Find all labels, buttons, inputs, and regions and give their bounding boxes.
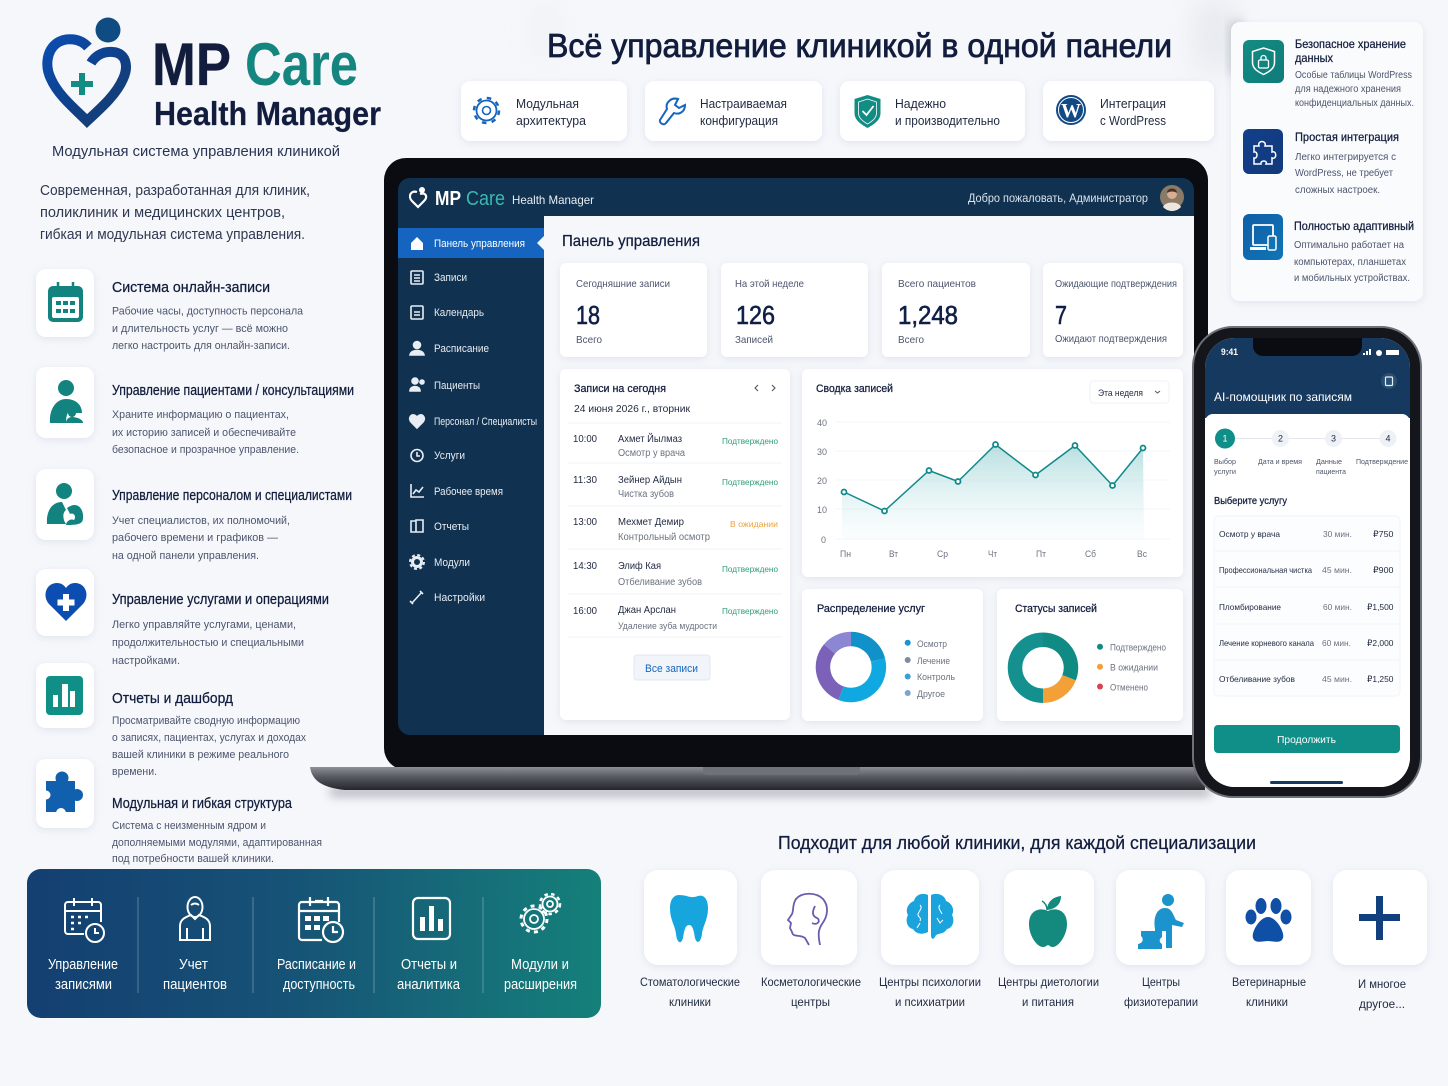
phone header: 9:41 — [1221, 347, 1238, 357]
description — [112, 515, 290, 562]
feature: staff — [36, 469, 352, 562]
service row — [1219, 565, 1394, 575]
header logo: Health Manager — [512, 193, 594, 207]
stat card: pending: Ожидают подтверждения — [1055, 333, 1167, 345]
y axis: 20 — [817, 476, 827, 487]
x axis: Чт — [988, 549, 998, 560]
heading: Управление услугами и операциями — [112, 592, 329, 608]
feature: modular — [36, 759, 322, 865]
line series — [842, 442, 1146, 539]
nav labels: Отчеты — [434, 521, 469, 533]
specialization: psychology: и психиатрии — [895, 995, 965, 1009]
description: под потребности вашей клиники. — [112, 853, 274, 865]
nav labels: Настройки — [434, 592, 485, 604]
chip: reliable: и производительно — [895, 113, 1000, 128]
logo — [47, 18, 381, 132]
chip: configurable — [645, 81, 822, 141]
benefit: responsive: Полностью адаптивный — [1294, 219, 1414, 233]
benefit: easy integration — [1243, 129, 1399, 196]
service row: Отбеливание зубов — [1219, 674, 1295, 684]
service row — [1219, 674, 1394, 684]
appointment row: Зейнер Айдын — [618, 475, 682, 486]
description: продолжительностью и специальными — [112, 637, 304, 649]
description: о записях, пациентах, услугах и доходах — [112, 732, 306, 744]
appointment row — [573, 605, 778, 632]
laptop mockup — [310, 158, 1210, 796]
feature: patients — [36, 367, 354, 456]
nav labels: Записи — [434, 272, 467, 284]
service row: 30 мин. — [1323, 529, 1352, 539]
band item: modules: расширения — [504, 976, 577, 993]
band item: appointments: записями — [55, 976, 112, 993]
description: и длительность услуг — всё можно — [112, 323, 288, 335]
service row: 60 мин. — [1323, 602, 1352, 612]
band item: reports: аналитика — [397, 976, 461, 993]
icon: puzzle — [36, 759, 94, 828]
specialization: nutrition: Центры диетологии — [998, 975, 1099, 989]
band item: schedule: Расписание и — [277, 956, 356, 973]
description — [112, 619, 304, 667]
nav labels: Рабочее время — [434, 486, 503, 498]
description: безопасное и прозрачное управление. — [112, 444, 299, 456]
panel: appointment summary line chart: Сводка записей — [816, 383, 893, 395]
service row: Осмотр у врача — [1219, 529, 1280, 539]
appointment row: Чистка зубов — [618, 488, 674, 500]
service row: 45 мин. — [1322, 674, 1352, 684]
appointment row: 11:30 — [573, 475, 597, 486]
booking steps: 4 — [1385, 434, 1391, 444]
heading: Управление пациентами / консультациями — [112, 383, 354, 399]
specialization: dental — [640, 870, 740, 1009]
benefit: secure storage: конфиденциальных данных. — [1295, 97, 1414, 109]
appointment row — [573, 560, 778, 588]
intro paragraph: гибкая и модульная система управления. — [40, 226, 305, 243]
description: их историю записей и обеспечивайте — [112, 427, 296, 439]
band item: modules: Модули и — [511, 956, 569, 973]
phone header — [1205, 338, 1410, 418]
description: Просматривайте сводную информацию — [112, 715, 300, 727]
band item: patients: пациентов — [163, 976, 227, 993]
service row: ₽900 — [1373, 565, 1394, 575]
nav labels: Услуги — [434, 450, 465, 462]
icon: seated patient — [1138, 894, 1184, 949]
chip: configurable: конфигурация — [700, 113, 778, 128]
nav labels: Модули — [434, 557, 470, 569]
stat card: today: Всего — [576, 334, 602, 346]
specialization: cosmetology: Косметологические — [761, 975, 861, 989]
appointment row: Ахмет Йылмаз — [618, 432, 682, 445]
panel: appointment summary line chart — [802, 369, 1183, 577]
icon: staff — [36, 469, 94, 540]
specialization: nutrition: и питания — [1022, 995, 1074, 1009]
legend: Другое — [917, 689, 945, 700]
service row: Лечение корневого канала — [1219, 638, 1314, 648]
stat card: week — [721, 263, 868, 357]
description: Рабочие часы, доступность персонала — [112, 306, 304, 318]
heading: Система онлайн-записи — [112, 280, 270, 296]
description: времени. — [112, 766, 157, 778]
benefit: responsive: Оптимально работает на — [1294, 239, 1404, 251]
specialization: and more: другое... — [1359, 997, 1405, 1011]
avatar — [1160, 185, 1184, 211]
appointment row: В ожидании — [730, 519, 778, 529]
icon: calendar — [36, 269, 94, 337]
logo text: MP Care: MP — [152, 31, 231, 98]
nav labels: Календарь — [434, 307, 484, 319]
x axis: Пт — [1036, 549, 1047, 560]
feature: services — [36, 569, 329, 667]
service row: 45 мин. — [1322, 565, 1352, 575]
service row: ₽1,250 — [1367, 674, 1394, 684]
header logo: Care — [466, 188, 505, 210]
band item: reports: Отчеты и — [401, 956, 457, 973]
stat card: today: 18 — [576, 300, 600, 330]
logo text: MP Care — [152, 31, 358, 98]
band item: appointments — [48, 898, 118, 993]
service row — [1219, 529, 1394, 539]
nav labels: Персонал / Специалисты — [434, 416, 537, 428]
chip: modular architecture: архитектура — [516, 113, 587, 128]
benefit: secure storage: для надежного хранения — [1295, 84, 1401, 95]
service row: Профессиональная чистка — [1219, 565, 1312, 575]
panel: appointment status donut — [997, 589, 1183, 721]
phone mockup — [1193, 327, 1421, 797]
band item: patients: Учет — [179, 956, 208, 973]
feature: reports — [36, 663, 306, 778]
legend — [905, 639, 955, 700]
stat card: pending: Ожидающие подтверждения — [1055, 278, 1177, 290]
stat card: today — [560, 263, 707, 357]
screen header — [398, 178, 1194, 216]
benefit: secure storage: данных — [1295, 51, 1333, 65]
specialization: nutrition — [998, 870, 1099, 1009]
description: на одной панели управления. — [112, 550, 259, 562]
appointment row: Элиф Кая — [618, 560, 661, 572]
specialization: physiotherapy — [1116, 870, 1205, 1009]
benefit: easy integration: сложных настроек. — [1295, 185, 1380, 196]
stat card: pending: 7 — [1055, 300, 1067, 330]
appointment row: 10:00 — [573, 434, 597, 445]
feature: online booking — [36, 269, 304, 352]
specialization: psychology — [879, 870, 981, 1009]
icon: wordpress: W — [1061, 100, 1081, 122]
chip: wordpress: Интеграция — [1100, 96, 1166, 111]
description: Легко управляйте услугами, ценами, — [112, 619, 296, 631]
booking steps: 1 — [1222, 434, 1228, 444]
appointment row — [573, 432, 778, 459]
appointment row: Мехмет Демир — [618, 517, 684, 528]
icon: plus — [1359, 896, 1400, 940]
booking steps: Данные — [1316, 457, 1342, 466]
dropdown: Эта неделя — [1098, 388, 1143, 399]
nav: active item — [398, 228, 544, 258]
y axis — [817, 418, 827, 546]
legend — [1097, 642, 1166, 694]
continue button — [1214, 725, 1400, 753]
tagline: Модульная система управления клиникой — [52, 143, 340, 160]
legend: Осмотр — [917, 639, 947, 650]
specialization: psychology: Центры психологии — [879, 975, 981, 989]
description: Храните информацию о пациентах, — [112, 409, 289, 421]
benefit: secure storage — [1243, 37, 1414, 109]
stat card: today: Сегодняшние записи — [576, 278, 670, 290]
booking steps: 2 — [1278, 434, 1283, 444]
specializations heading: Подходит для любой клиники, для каждой специализации — [778, 833, 1256, 853]
specialization: dental: клиники — [669, 995, 711, 1009]
stat card: patients: Всего — [898, 334, 924, 346]
appointment row: 16:00 — [573, 606, 597, 617]
benefit: secure storage: Безопасное хранение — [1295, 37, 1406, 51]
heading: Отчеты и дашборд — [112, 691, 234, 707]
icon: gear — [474, 98, 499, 123]
description: вашей клиники в режиме реального — [112, 749, 289, 761]
description: Система с неизменным ядром и — [112, 820, 266, 832]
service row — [1219, 638, 1394, 648]
nav labels: Пациенты — [434, 380, 480, 392]
band item: patients — [163, 897, 227, 993]
booking steps: 3 — [1331, 434, 1336, 444]
x axis: Вт — [889, 549, 899, 560]
specialization: veterinary: клиники — [1246, 995, 1288, 1009]
stat card: week: 126 — [736, 300, 775, 330]
intro paragraph: Современная, разработанная для клиник, — [40, 182, 310, 199]
icon: patient — [36, 367, 94, 438]
chip: wordpress — [1043, 81, 1214, 141]
icon: shield — [854, 95, 880, 128]
chip: modular architecture — [461, 81, 627, 141]
booking steps: пациента — [1316, 467, 1347, 476]
specialization: and more — [1333, 870, 1427, 1011]
heading: Модульная и гибкая структура — [112, 796, 293, 812]
band item: appointments: Управление — [48, 956, 118, 973]
benefit: secure storage: Особые таблицы WordPress — [1295, 69, 1412, 81]
appointment row: Контрольный осмотр — [618, 532, 710, 543]
x axis: Вс — [1137, 549, 1147, 560]
y axis: 0 — [821, 535, 826, 546]
icon: apple — [1029, 896, 1067, 947]
band item: modules — [504, 894, 577, 993]
booking steps — [1214, 428, 1408, 476]
phone content panel — [1205, 414, 1410, 787]
band item: schedule: доступность — [283, 976, 355, 993]
description: настройками. — [112, 655, 180, 667]
appointment row: Джан Арслан — [618, 605, 676, 616]
y axis: 30 — [817, 447, 827, 458]
legend: Отменено — [1110, 682, 1148, 694]
band item: schedule — [277, 897, 356, 993]
legend: В ожидании — [1110, 662, 1158, 674]
benefit: easy integration: Простая интеграция — [1295, 130, 1399, 144]
welcome text: Добро пожаловать, Администратор — [968, 191, 1148, 205]
y axis: 10 — [817, 505, 827, 516]
intro paragraph — [40, 182, 310, 243]
x axis: Сб — [1085, 549, 1096, 560]
appointment row — [573, 517, 778, 543]
legend: Подтверждено — [1110, 642, 1166, 654]
logo text: Health Manager: Health Manager — [154, 95, 381, 132]
nav labels: Расписание — [434, 343, 489, 355]
icon: paw — [1246, 898, 1292, 942]
description — [112, 715, 306, 778]
benefit: easy integration: Легко интегрируется с — [1295, 152, 1396, 163]
description: Учет специалистов, их полномочий, — [112, 515, 290, 527]
description: дополняемыми модулями, адаптированная — [112, 837, 322, 849]
continue button: Продолжить — [1277, 734, 1337, 746]
panel: capability band — [27, 869, 601, 1018]
appointment row: 14:30 — [573, 561, 597, 572]
service row: ₽2,000 — [1367, 638, 1394, 648]
specialization: and more: И многое — [1358, 977, 1406, 991]
y axis: 40 — [817, 418, 827, 429]
icon: heart plus — [36, 569, 94, 636]
dropdown — [1090, 381, 1169, 403]
chip: reliable: Надежно — [895, 96, 946, 111]
specialization: cosmetology: центры — [791, 995, 830, 1009]
description — [112, 820, 322, 865]
chip: modular architecture: Модульная — [516, 96, 579, 111]
home indicator — [1270, 781, 1343, 784]
benefit: responsive — [1243, 214, 1414, 284]
service list heading: Выберите услугу — [1214, 495, 1287, 507]
icon: tooth — [670, 895, 708, 942]
panel: benefits — [1231, 22, 1423, 301]
specialization: physiotherapy: Центры — [1142, 975, 1180, 989]
service row: ₽750 — [1373, 529, 1394, 539]
appointment row: Подтверждено — [722, 477, 778, 487]
chip: reliable — [840, 81, 1025, 141]
description: легко настроить для онлайн-записи. — [112, 340, 290, 352]
x axis: Пн — [840, 549, 851, 560]
legend: Лечение — [917, 656, 950, 667]
specialization: veterinary: Ветеринарные — [1232, 975, 1306, 989]
specialization: physiotherapy: физиотерапии — [1124, 995, 1198, 1009]
service row: ₽1,500 — [1367, 602, 1394, 612]
panel: appointment status donut: Статусы записей — [1015, 603, 1097, 615]
stat card: week: На этой неделе — [735, 278, 804, 290]
appointment row: Удаление зуба мудрости — [618, 621, 717, 632]
button: all appointments: Все записи — [645, 663, 698, 675]
laptop base — [310, 158, 1210, 796]
header logo: MP — [435, 188, 461, 210]
stat card: patients — [882, 263, 1030, 357]
appointment row — [573, 475, 778, 500]
heading: Управление персоналом и специалистами — [112, 488, 352, 504]
specialization: cosmetology — [761, 870, 861, 1009]
booking steps: Подтверждение — [1356, 457, 1408, 466]
booking steps: Дата и время — [1258, 457, 1302, 466]
intro paragraph: поликлиник и медицинских центров, — [40, 204, 285, 221]
specialization: veterinary — [1226, 870, 1311, 1009]
stat card: patients: Всего пациентов — [898, 278, 976, 290]
stat card: week: Записей — [735, 334, 773, 346]
icon: brain — [907, 894, 953, 939]
logo text: MP Care: Care — [245, 31, 358, 98]
button: all appointments — [634, 655, 710, 680]
panel: today's appointments — [560, 369, 790, 720]
appointment row: Подтверждено — [722, 436, 778, 446]
chip: configurable: Настраиваемая — [700, 96, 787, 111]
description — [112, 306, 304, 352]
panel: service distribution donut: Распределение услуг — [817, 603, 925, 615]
phone header: AI-помощник по записям — [1214, 390, 1352, 404]
nav icons — [410, 271, 424, 604]
donut — [823, 639, 879, 695]
benefit: responsive: компьютерах, планшетах — [1294, 257, 1406, 268]
service row: 60 мин. — [1322, 638, 1351, 648]
specialization: dental: Стоматологические — [640, 975, 740, 989]
service list — [1214, 516, 1400, 696]
benefit: easy integration: WordPress, не требует — [1295, 167, 1393, 179]
panel: today's appointments: 24 июня 2026 г., вторник — [574, 404, 691, 415]
panel: service distribution donut — [802, 589, 983, 721]
chip: wordpress: с WordPress — [1100, 113, 1166, 128]
service row — [1219, 602, 1394, 612]
appointment row: Подтверждено — [722, 564, 778, 574]
appointment row: Отбеливание зубов — [618, 576, 702, 588]
description — [112, 409, 299, 456]
nav: active item: Панель управления — [434, 238, 525, 250]
booking steps: Выбор — [1214, 457, 1236, 466]
description: рабочего времени и графиков — — [112, 532, 278, 544]
dashboard main area — [544, 216, 1194, 735]
logo mark: heart — [47, 18, 126, 121]
icon: wrench — [660, 99, 685, 124]
benefit: responsive: и мобильных устройствах. — [1294, 272, 1410, 284]
icon: face profile — [788, 894, 827, 945]
appointment row: Подтверждено — [722, 606, 778, 616]
booking steps: услуги — [1214, 467, 1236, 476]
x axis: Ср — [937, 549, 948, 560]
appointment row: 13:00 — [573, 517, 597, 528]
icon: wordpress — [1056, 95, 1086, 125]
stat card: pending — [1043, 263, 1183, 357]
panel: today's appointments: Записи на сегодня — [574, 383, 666, 395]
icon: report chart — [36, 663, 94, 728]
dashboard title: Панель управления — [562, 233, 700, 250]
donut — [1015, 640, 1071, 696]
x axis — [840, 549, 1147, 560]
main title: Всё управление клиникой в одной панели — [547, 27, 1172, 64]
band item: reports — [397, 898, 461, 993]
service row: Пломбирование — [1219, 602, 1281, 612]
sidebar — [398, 216, 544, 735]
appointment row: Осмотр у врача — [618, 448, 685, 459]
header logo — [410, 187, 594, 210]
stat card: patients: 1,248 — [898, 300, 958, 330]
nav labels — [434, 272, 537, 604]
legend: Контроль — [917, 672, 955, 683]
